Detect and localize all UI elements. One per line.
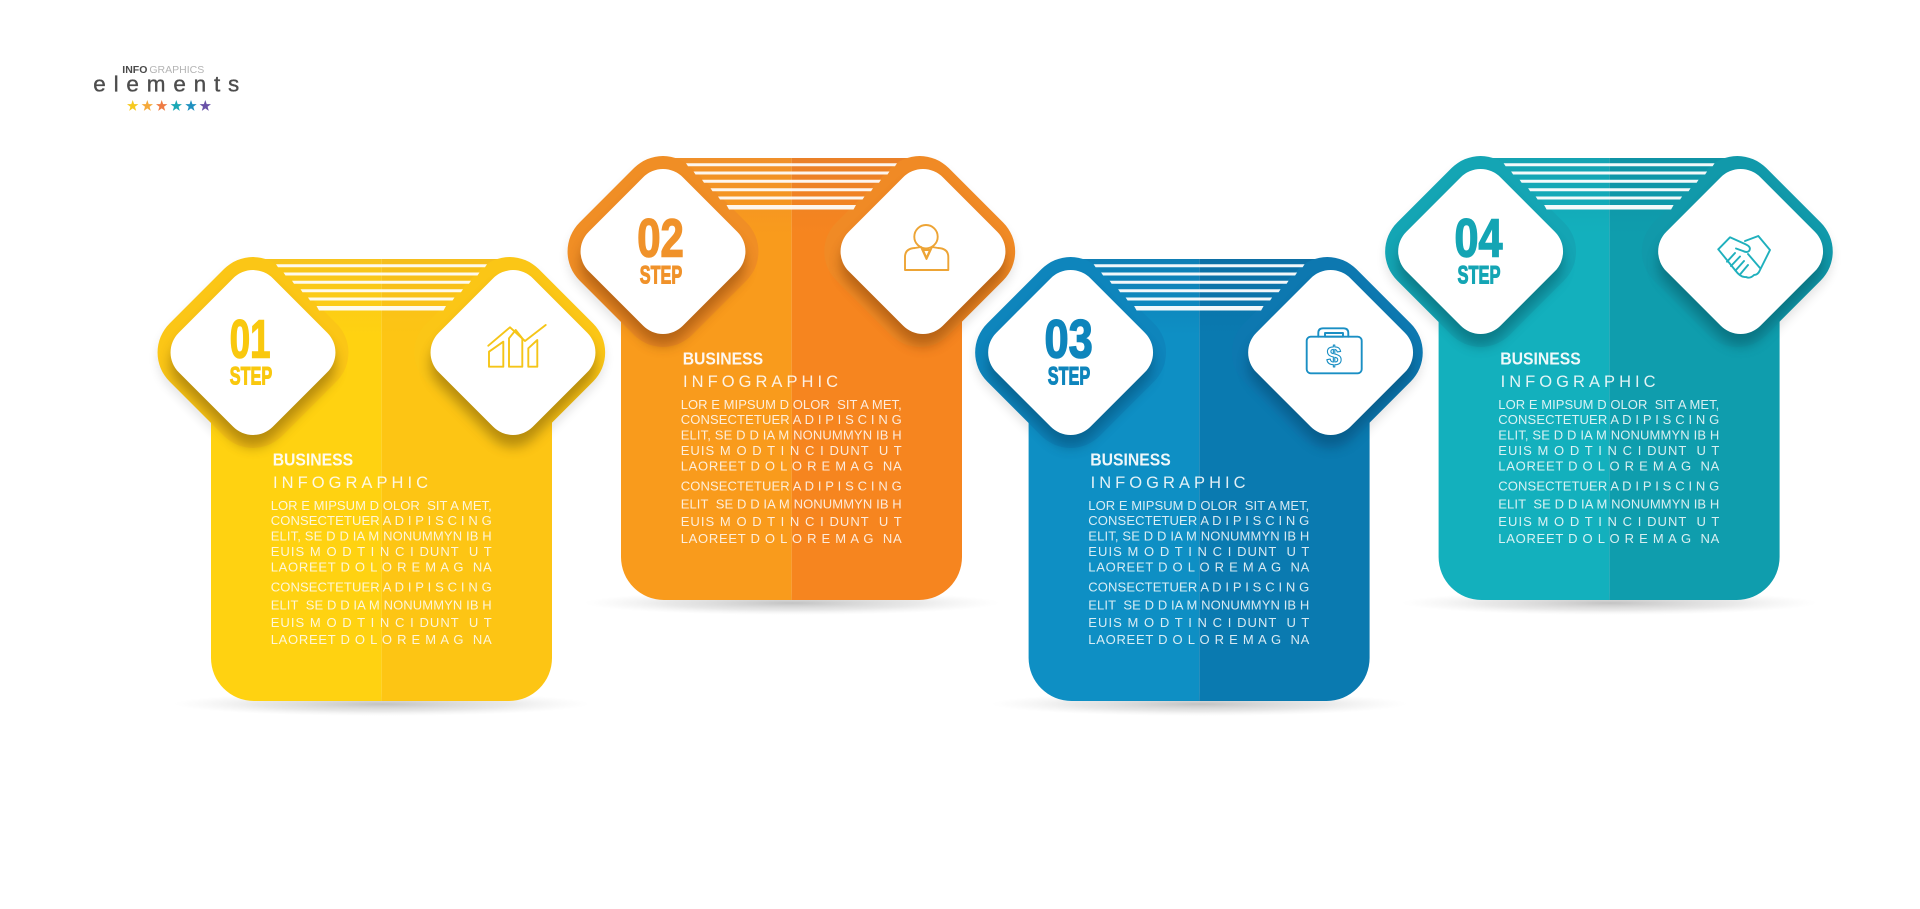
ground shadow 02 bbox=[584, 591, 1000, 615]
frame shadow 03 bbox=[958, 246, 1440, 471]
body text 02: ELIT, SE D D IA M NONUMMYN IB H bbox=[681, 428, 902, 443]
heading 03 bbox=[1090, 450, 1246, 492]
step number 04 bbox=[1454, 209, 1502, 289]
icon: money briefcase: $ bbox=[1326, 341, 1342, 371]
frame shadow 04 bbox=[1368, 145, 1850, 370]
heading 02: BUSINESS bbox=[683, 348, 763, 368]
logo: elements wordmark: elements bbox=[93, 72, 239, 96]
panel: step 04 teal bbox=[1384, 156, 1834, 612]
body text 04: CONSECTETUER A D I P I S C I N G bbox=[1498, 479, 1719, 494]
body text 04: ELIT SE D D IA M NONUMMYN IB H bbox=[1498, 497, 1719, 512]
logo: rating stars bbox=[127, 100, 211, 111]
diamond frames 01 bbox=[141, 240, 622, 465]
body text 03: ELIT, SE D D IA M NONUMMYN IB H bbox=[1088, 529, 1309, 544]
top stripes 03 bbox=[1094, 264, 1305, 310]
body text 04: LOR E MIPSUM D OLOR SIT A MET, bbox=[1498, 397, 1719, 412]
body text 01 bbox=[271, 498, 492, 647]
body text 03: CONSECTETUER A D I P I S C I N G bbox=[1088, 580, 1309, 595]
step number 03: STEP bbox=[1048, 362, 1090, 390]
step number 04: 04 bbox=[1454, 209, 1502, 269]
body text 02: ELIT SE D D IA M NONUMMYN IB H bbox=[681, 497, 902, 512]
body text 01: CONSECTETUER A D I P I S C I N G bbox=[271, 513, 492, 528]
diamond frames 03 bbox=[958, 240, 1440, 465]
step number 01: 01 bbox=[230, 310, 270, 370]
step number 04: STEP bbox=[1458, 261, 1500, 289]
body text 01: ELIT SE D D IA M NONUMMYN IB H bbox=[271, 598, 492, 613]
frame shadow 02 bbox=[551, 145, 1032, 370]
heading 03: BUSINESS bbox=[1090, 450, 1171, 470]
heading 04: INFOGRAPHIC bbox=[1501, 373, 1656, 391]
icon: growth chart bbox=[488, 325, 546, 367]
top stripes 02 bbox=[686, 163, 897, 210]
white diamonds 04 bbox=[1387, 157, 1835, 346]
heading 04 bbox=[1500, 348, 1656, 391]
body text 03 bbox=[1088, 498, 1310, 647]
body text 02: CONSECTETUER A D I P I S C I N G bbox=[681, 479, 902, 494]
body text 04: LAOREET D O L O R E M A G NA bbox=[1498, 459, 1720, 474]
ground shadow 04 bbox=[1402, 591, 1818, 615]
body text 03: LAOREET D O L O R E M A G NA bbox=[1088, 632, 1310, 647]
heading 01 bbox=[273, 450, 428, 492]
ground shadow 01 bbox=[174, 692, 590, 716]
step number 02 bbox=[637, 209, 684, 289]
body text 02: EUIS M O D T I N C I DUNT U T bbox=[681, 443, 902, 458]
diamond shadows 03 bbox=[984, 348, 1418, 452]
body text 01: EUIS M O D T I N C I DUNT U T bbox=[271, 544, 492, 559]
body text 04: CONSECTETUER A D I P I S C I N G bbox=[1498, 412, 1719, 427]
icon: handshake bbox=[1718, 236, 1770, 278]
white diamonds 01 bbox=[159, 258, 607, 447]
icon: person bbox=[905, 225, 948, 270]
panel: step 02 orange bbox=[551, 139, 1032, 615]
step number 02: STEP bbox=[640, 261, 682, 289]
diamond shadows 01 bbox=[164, 343, 602, 454]
panel: step 01 yellow bbox=[141, 240, 622, 716]
step number 03: 03 bbox=[1044, 310, 1093, 370]
step number 02: 02 bbox=[637, 209, 684, 269]
logo bbox=[93, 64, 239, 111]
body text 04 bbox=[1498, 397, 1720, 546]
diamond frames 02 bbox=[551, 139, 1032, 364]
body text 03: LAOREET D O L O R E M A G NA bbox=[1088, 560, 1310, 575]
body text 03: EUIS M O D T I N C I DUNT U T bbox=[1088, 615, 1309, 630]
body text 04: ELIT, SE D D IA M NONUMMYN IB H bbox=[1498, 428, 1719, 443]
heading 02: INFOGRAPHIC bbox=[683, 373, 838, 391]
body text 02 bbox=[681, 397, 902, 546]
card body 02 bbox=[621, 158, 962, 600]
body text 03: EUIS M O D T I N C I DUNT U T bbox=[1088, 544, 1309, 559]
diamond shadows 04 bbox=[1394, 246, 1828, 351]
heading 03: INFOGRAPHIC bbox=[1091, 474, 1246, 492]
body text 02: LAOREET D O L O R E M A G NA bbox=[681, 531, 902, 546]
card body 01 bbox=[211, 259, 552, 701]
body text 03: ELIT SE D D IA M NONUMMYN IB H bbox=[1088, 598, 1309, 613]
step number 01: STEP bbox=[230, 362, 272, 390]
diamond frames 04 bbox=[1368, 139, 1850, 364]
body text 04: EUIS M O D T I N C I DUNT U T bbox=[1498, 514, 1719, 529]
top stripes 04 bbox=[1504, 163, 1715, 210]
body text 01: CONSECTETUER A D I P I S C I N G bbox=[271, 580, 492, 595]
body text 04: EUIS M O D T I N C I DUNT U T bbox=[1498, 443, 1719, 458]
heading 01: INFOGRAPHIC bbox=[273, 474, 428, 492]
body text 01: LAOREET D O L O R E M A G NA bbox=[271, 632, 492, 647]
body text 03: CONSECTETUER A D I P I S C I N G bbox=[1088, 513, 1309, 528]
body text 03: LOR E MIPSUM D OLOR SIT A MET, bbox=[1088, 498, 1309, 513]
card body 04 bbox=[1439, 158, 1780, 600]
white diamonds 03 bbox=[977, 258, 1425, 447]
icon: money briefcase bbox=[1307, 328, 1362, 373]
card body 03 bbox=[1029, 259, 1370, 701]
heading 02 bbox=[683, 348, 838, 391]
heading 04: BUSINESS bbox=[1500, 348, 1581, 368]
body text 04: LAOREET D O L O R E M A G NA bbox=[1498, 531, 1720, 546]
step number 03 bbox=[1044, 310, 1093, 390]
body text 02: EUIS M O D T I N C I DUNT U T bbox=[681, 514, 902, 529]
panel: step 03 blue bbox=[958, 240, 1440, 716]
white diamonds 02 bbox=[569, 157, 1017, 346]
logo: infographics line: INFOGRAPHICS bbox=[122, 64, 204, 76]
frame shadow 01 bbox=[141, 246, 622, 471]
body text 01: ELIT, SE D D IA M NONUMMYN IB H bbox=[271, 529, 492, 544]
body text 01: LAOREET D O L O R E M A G NA bbox=[271, 560, 492, 575]
ground shadow 03 bbox=[992, 692, 1408, 716]
body text 02: LAOREET D O L O R E M A G NA bbox=[681, 459, 902, 474]
body text 01: LOR E MIPSUM D OLOR SIT A MET, bbox=[271, 498, 492, 513]
step number 01 bbox=[230, 310, 272, 390]
top stripes 01 bbox=[276, 264, 487, 310]
body text 02: LOR E MIPSUM D OLOR SIT A MET, bbox=[681, 397, 902, 412]
diamond shadows 02 bbox=[574, 242, 1012, 352]
body text 02: CONSECTETUER A D I P I S C I N G bbox=[681, 412, 902, 427]
heading 01: BUSINESS bbox=[273, 450, 353, 470]
body text 01: EUIS M O D T I N C I DUNT U T bbox=[271, 615, 492, 630]
